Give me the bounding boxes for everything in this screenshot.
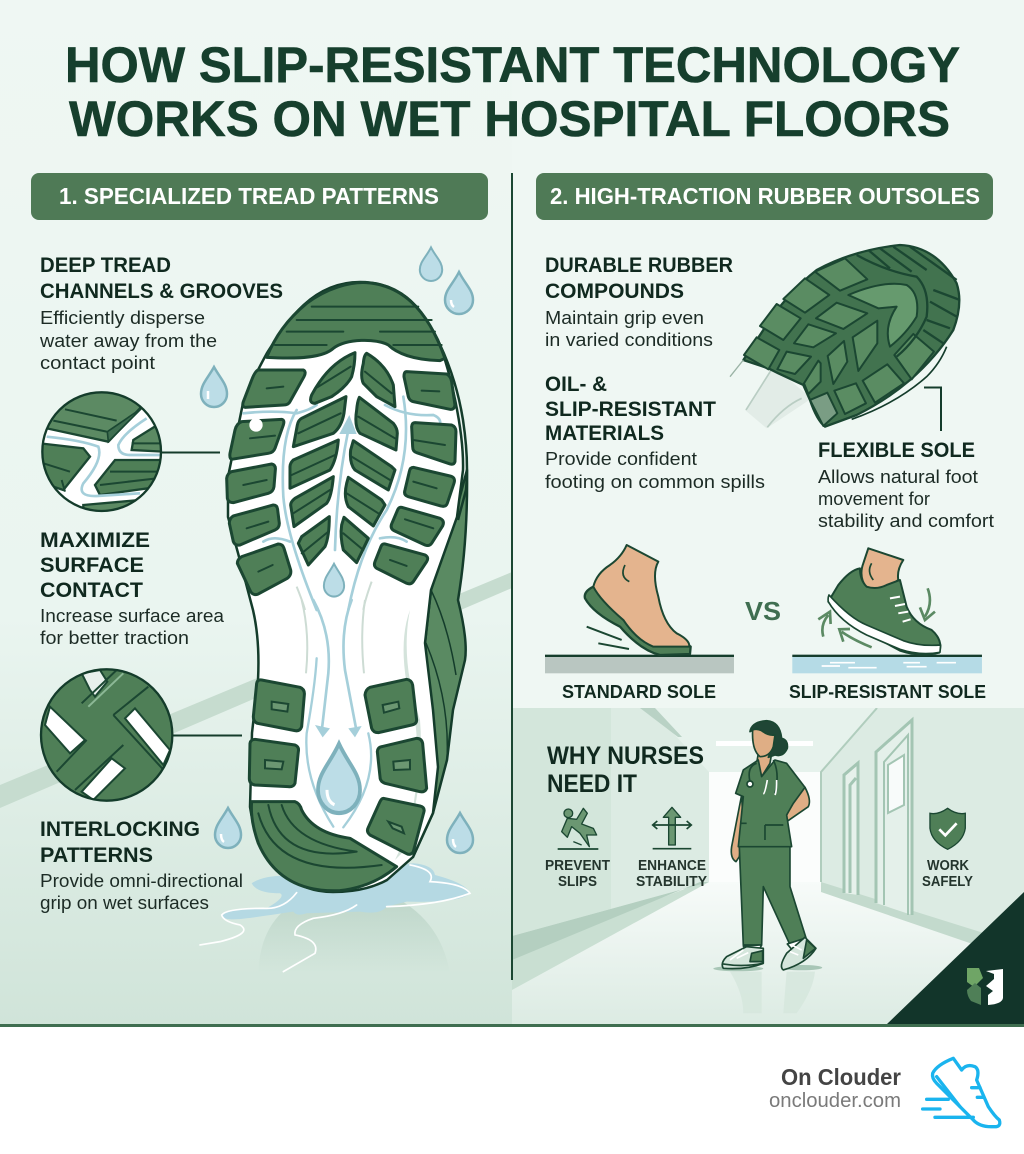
right edge line (400, 293, 467, 520)
text block: flexible sole: stability and comfort (818, 511, 994, 531)
text block: flexible sole: FLEXIBLE SOLE (818, 439, 975, 462)
column divider (511, 173, 513, 980)
text block: oil and slip-resistant materials (545, 373, 765, 492)
panel: section header 1 (31, 173, 488, 220)
doors (844, 763, 858, 895)
panel: section header 2: 2. HIGH-TRACTION RUBBER OUTSOLES (550, 183, 980, 209)
text block: durable rubber compounds (545, 254, 733, 350)
text block: deep tread channels: DEEP TREAD (40, 254, 171, 277)
benefit: enhance stability: ENHANCE (638, 858, 706, 874)
text block: maximize surface contact: Increase surface area (40, 606, 225, 626)
floor (545, 655, 734, 673)
icon: falling person (558, 808, 598, 849)
hospital corridor (512, 708, 1024, 1024)
benefit: work safely (922, 808, 973, 890)
text block: interlocking patterns: INTERLOCKING (40, 818, 200, 841)
bare foot (585, 587, 691, 655)
detail circle: interlocking pattern (41, 669, 242, 801)
text block: interlocking patterns (40, 818, 243, 913)
water droplets (201, 247, 473, 853)
text block: maximize surface contact: SURFACE (40, 554, 144, 577)
title (65, 37, 960, 147)
text block: deep tread channels: Efficiently disperse (40, 308, 205, 328)
text block: interlocking patterns: PATTERNS (40, 844, 153, 867)
detail circle: tread channels (33, 390, 220, 517)
icon: shield (930, 808, 965, 849)
comparison: slip-resistant sole: SLIP-RESISTANT SOLE (789, 682, 986, 702)
text block: durable rubber compounds: Maintain grip even (545, 308, 704, 328)
text block: oil and slip-resistant materials: MATERIALS (545, 422, 664, 445)
footer brand text: onclouder.com (769, 1090, 901, 1112)
text block: deep tread channels: contact point (40, 353, 155, 373)
nurse shoes (722, 937, 816, 970)
heading: why nurses need it: WHY NURSES (547, 742, 704, 770)
heel water channels (302, 600, 371, 827)
text block: durable rubber compounds: DURABLE RUBBER (545, 254, 733, 277)
heel cap (251, 802, 397, 891)
text block: deep tread channels: water away from the (39, 331, 217, 351)
text block: deep tread channels: CHANNELS & GROOVES (40, 280, 283, 303)
text block: oil and slip-resistant materials: SLIP-RESISTANT (545, 398, 716, 421)
comparison: slip-resistant sole (789, 548, 986, 702)
text block: maximize surface contact: MAXIMIZE (40, 529, 150, 552)
heel tread (249, 600, 427, 891)
benefit: enhance stability (636, 807, 707, 890)
panel: section header 1: 1. SPECIALIZED TREAD PATTERNS (59, 183, 439, 209)
vs label: VS (745, 596, 781, 626)
benefit: work safely: WORK (927, 858, 969, 874)
icon: brand logo (967, 968, 1003, 1005)
benefit: prevent slips (545, 808, 610, 890)
text block: deep tread channels (39, 254, 283, 373)
benefit: prevent slips: SLIPS (558, 874, 597, 890)
icon: stability arrows (653, 807, 691, 849)
icon: running shoe logo (923, 1058, 1000, 1127)
footer rule (0, 1024, 1024, 1027)
title: HOW SLIP-RESISTANT TECHNOLOGY (65, 37, 960, 93)
text block: interlocking patterns: grip on wet surfaces (40, 893, 209, 913)
text block: flexible sole: movement for (818, 489, 930, 509)
outer lugs (227, 370, 456, 595)
text block: interlocking patterns: Provide omni-directional (40, 871, 243, 891)
text block: durable rubber compounds: in varied conditions (545, 330, 713, 350)
benefit: prevent slips: PREVENT (545, 858, 610, 874)
icon: large drop in heel (318, 744, 360, 813)
panel: section header 2 (536, 173, 993, 220)
title: WORKS ON WET HOSPITAL FLOORS (69, 91, 950, 147)
center chevron lugs (290, 353, 397, 565)
shoe outsole illustration (227, 282, 467, 892)
sole base (228, 282, 463, 892)
benefit: enhance stability: STABILITY (636, 874, 707, 890)
text block: flexible sole (818, 439, 994, 531)
corner triangle (887, 892, 1024, 1024)
footer brand text: On Clouder (781, 1064, 901, 1090)
comparison: standard sole: STANDARD SOLE (562, 682, 716, 702)
callout line: flexible sole (924, 388, 941, 431)
nurse figure (713, 721, 822, 1013)
footer brand text (769, 1064, 901, 1112)
text block: maximize surface contact (40, 529, 225, 648)
forefoot tread (227, 283, 456, 610)
shoe (861, 548, 903, 591)
benefit: work safely: SAFELY (922, 874, 973, 890)
flexing outsole illustration (730, 245, 960, 428)
panel: why nurses need it (512, 708, 1024, 1024)
text block: maximize surface contact: for better traction (40, 628, 189, 648)
text block: oil and slip-resistant materials: Provide confident (545, 449, 697, 469)
wet floor (792, 655, 982, 673)
heading: why nurses need it (547, 742, 704, 798)
text block: durable rubber compounds: COMPOUNDS (545, 280, 684, 303)
water channels (243, 397, 440, 610)
text block: maximize surface contact: CONTACT (40, 579, 143, 602)
text block: oil and slip-resistant materials: footing on common spills (545, 472, 765, 492)
text block: oil and slip-resistant materials: OIL- & (545, 373, 607, 396)
heading: why nurses need it: NEED IT (547, 770, 637, 798)
comparison: standard sole (545, 545, 734, 702)
puddle and reflection (200, 863, 470, 973)
heel lugs (249, 679, 427, 854)
shoe upper side (413, 470, 467, 857)
text block: flexible sole: Allows natural foot (818, 467, 978, 487)
toe cap (267, 283, 445, 361)
